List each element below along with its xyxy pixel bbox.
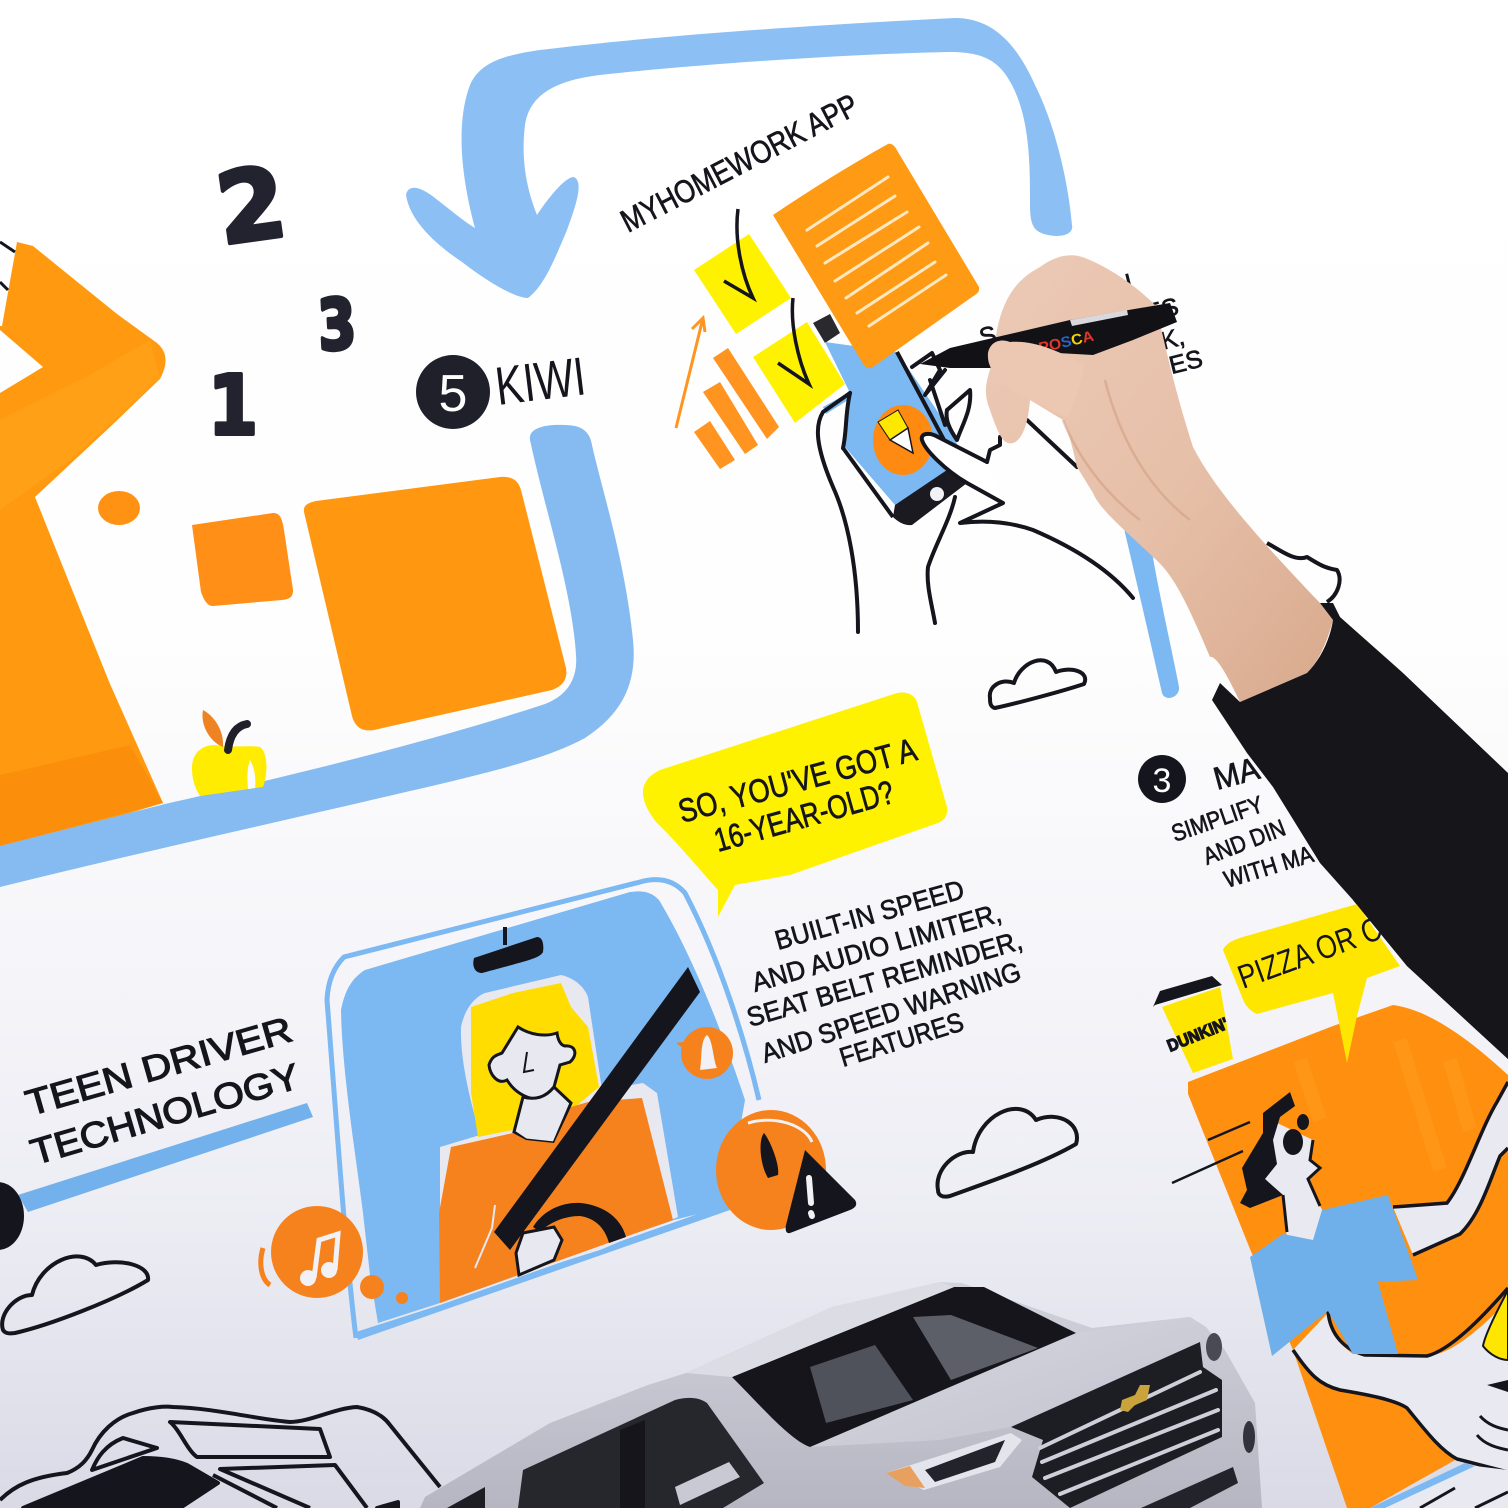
- section 3 text: WITH MA: [1221, 841, 1317, 894]
- heading: teen driver technology: [21, 1008, 304, 1173]
- badge: 5 Kiwi: KIWI: [492, 346, 589, 417]
- small orange square: [192, 513, 293, 606]
- heading: teen driver technology: TECHNOLOGY: [26, 1055, 304, 1173]
- icon: coffee cup: DUNKIN': [1164, 1014, 1231, 1056]
- text: built-in speed features: AND AUDIO LIMITER,: [748, 898, 1005, 998]
- numbers: 2 3 1: 1: [208, 359, 258, 454]
- illustration: driver in car window: [327, 880, 759, 1340]
- speech bubble: so, you've got a 16-year-old: SO, YOU'VE GOT A: [674, 731, 920, 830]
- text: built-in speed features: BUILT-IN SPEED: [772, 874, 967, 956]
- speech bubble: pizza or: [1223, 904, 1400, 1063]
- section 3 text: AND DIN: [1199, 815, 1289, 871]
- partial text behind hand: TES: [1127, 293, 1181, 332]
- partial text behind hand: SES: [1150, 345, 1205, 384]
- illustration: silver SUV: [420, 1282, 1262, 1508]
- icon: hand holding phone: [813, 314, 1133, 632]
- partial text behind hand: RK,: [1140, 323, 1187, 360]
- badge: 5 Kiwi: 5: [439, 365, 467, 423]
- text: built-in speed features: FEATURES: [836, 1007, 967, 1073]
- icon: apple: [192, 710, 266, 796]
- speech bubble: so, you've got a 16-year-old: 16-YEAR-OLD?: [710, 773, 898, 859]
- blue J-shaped line: [0, 425, 634, 887]
- sleeve: [1212, 603, 1508, 1059]
- label: myHomework app: MYHOMEWORK APP: [615, 87, 864, 239]
- heading: teen driver technology: TEEN DRIVER: [21, 1008, 297, 1124]
- large orange square: [304, 477, 566, 730]
- sleeve lower edge overlapping bubble: [1353, 850, 1508, 1059]
- section 3: label: [1138, 755, 1186, 803]
- icon: orange house shape at left: [0, 242, 166, 846]
- blue underline and black badge: [0, 1103, 313, 1250]
- icon: coffee cup: [1153, 976, 1233, 1073]
- speech bubble: so, you've got a 16-year-old: [643, 692, 947, 917]
- section 3 text: MA: [1209, 750, 1264, 797]
- partial text behind hand: RCH: [1076, 269, 1135, 309]
- section 3 text: SIMPLIFY: [1168, 791, 1267, 848]
- arrow: blue loop top: [406, 18, 1072, 298]
- marker pen: [920, 303, 1177, 368]
- text: built-in speed features: SEAT BELT REMINDER,: [743, 925, 1026, 1033]
- blue vertical line right: [1122, 520, 1179, 698]
- badge: 5 Kiwi: [416, 346, 589, 429]
- hand with marker: [986, 255, 1333, 702]
- numbers: 2 3 1: 2: [210, 146, 293, 268]
- partial text behind hand: S: [976, 321, 999, 352]
- text: built-in speed features: [743, 874, 1026, 1073]
- icon: yellow checkboxes: [694, 209, 845, 423]
- section 3 text: [1168, 750, 1317, 894]
- numbers: 2 3 1: [208, 146, 358, 454]
- text: built-in speed features: AND SPEED WARNING: [758, 956, 1025, 1069]
- icon: orange dot: [98, 491, 140, 525]
- icons: bell and warning: [261, 1027, 856, 1304]
- illustration: orange panel with person: [1172, 1005, 1508, 1508]
- thumb over pen: [988, 340, 1085, 417]
- illustration: car outline: [0, 1407, 440, 1508]
- icon: orange document: [773, 144, 979, 368]
- section 3: label: 3: [1153, 762, 1171, 800]
- marker pen: POSCA: [1037, 328, 1096, 357]
- icon: bar chart with arrow: [676, 318, 779, 469]
- speech bubble: pizza or: PIZZA OR C: [1233, 910, 1386, 996]
- icons: clouds: [2, 543, 1340, 1333]
- numbers: 2 3 1: 3: [316, 283, 358, 367]
- partial text behind hand: [976, 269, 1205, 384]
